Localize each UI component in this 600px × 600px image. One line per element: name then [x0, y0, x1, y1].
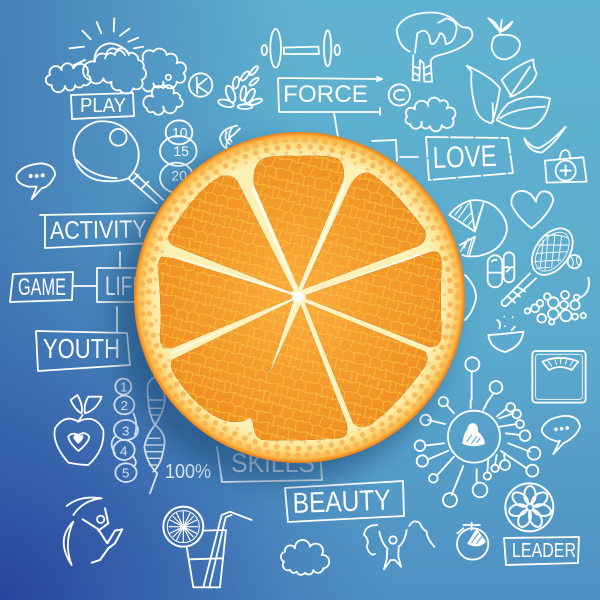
rind and pith: [134, 132, 465, 463]
icon: numbers stack 10 15 20: 10: [172, 124, 188, 140]
icon: tree and roots: [397, 13, 472, 82]
label: SKILLS box: SKILLS: [231, 448, 315, 478]
icon: speech bubble left: [16, 163, 55, 199]
icon: plant sprig: [217, 65, 263, 109]
icon: circle doodle behind slice: [465, 275, 476, 320]
icon: medical kit: [545, 150, 587, 183]
icon: K coin: [189, 73, 212, 97]
icon: copyright: [389, 84, 410, 106]
icon: table tennis paddle: [73, 121, 163, 203]
icon: numbered beads chain: 5: [122, 465, 129, 480]
chart: pie chart doodle: [449, 200, 507, 256]
label: PLAY box: [71, 93, 134, 119]
icon: numbered beads chain: 4: [120, 443, 128, 458]
connector: ACTIVITY to LIFE: [73, 252, 120, 332]
fruit segments: [158, 156, 442, 441]
label: LIFE box: [97, 268, 145, 302]
icon: stopwatch: [457, 523, 488, 560]
icon: top bead: 1: [120, 380, 127, 395]
icon: numbers stack 10 15 20: [160, 120, 197, 193]
icon: numbers stack 10 15 20: 20: [171, 168, 187, 184]
diagram: network around person: [415, 397, 540, 507]
label: LIFE box: LIFE: [105, 271, 145, 301]
label: FORCE box: FORCE: [283, 81, 368, 108]
white membrane lines: [171, 177, 430, 420]
icon: bathroom scale: [532, 351, 586, 403]
rind oil dots: [142, 140, 458, 456]
icon: sun behind clouds: [46, 18, 186, 94]
icon: person with arms raised: [364, 521, 434, 569]
icon: drink with orange slice: [163, 507, 252, 587]
icon: cloud bottom: [281, 540, 329, 575]
icon: dumbbell: [262, 29, 340, 68]
label: 100 percent: 100%: [165, 461, 211, 483]
icon: numbers stack 10 15 20: 15: [173, 143, 189, 159]
icon: grapes: [525, 278, 589, 325]
label: LEADER box: [504, 537, 579, 565]
label: LOVE box: LOVE: [432, 140, 497, 175]
drop shadow of orange: [114, 146, 450, 482]
icon: tennis racket and ball: [502, 221, 581, 306]
icon: orange slice doodle: [505, 483, 553, 531]
icon: small cloud right: [405, 98, 455, 131]
icon: speech bubble right: [542, 416, 580, 454]
label: GAME box: GAME: [18, 274, 66, 301]
icon: gymnast: [64, 498, 122, 565]
label: ACTIVITY box: ACTIVITY: [50, 215, 147, 245]
icon: bowl with steam: [488, 317, 523, 352]
icon: DNA helix: [144, 377, 165, 493]
icon: numbered beads chain: 2: [121, 398, 128, 413]
icon: heart: [511, 191, 553, 228]
label: YOUTH box: YOUTH: [43, 333, 120, 364]
icon: check mark: [524, 127, 566, 153]
label: GAME box: [10, 272, 73, 302]
icon: apple top right: [488, 18, 520, 59]
label: BEAUTY box: BEAUTY: [292, 485, 391, 520]
label: YOUTH box: [36, 331, 130, 371]
icon: small cloud: [143, 85, 183, 115]
icon: numbered beads chain: [112, 396, 138, 482]
icon: large leaves: [467, 59, 550, 129]
orange slice: [134, 132, 465, 463]
icon: crescent: [220, 126, 240, 148]
label: PLAY box: PLAY: [80, 95, 126, 117]
network upper nodes: [465, 357, 502, 403]
label: FORCE box: [278, 77, 382, 115]
icon: apple with heart: [54, 395, 103, 465]
icon: top bead: [115, 379, 131, 395]
label: LEADER box: LEADER: [512, 540, 576, 562]
connector: FORCE to hidden box and LOVE: [334, 113, 418, 161]
icon: numbered beads chain: 3: [122, 423, 129, 438]
icon: pills: [488, 252, 514, 287]
